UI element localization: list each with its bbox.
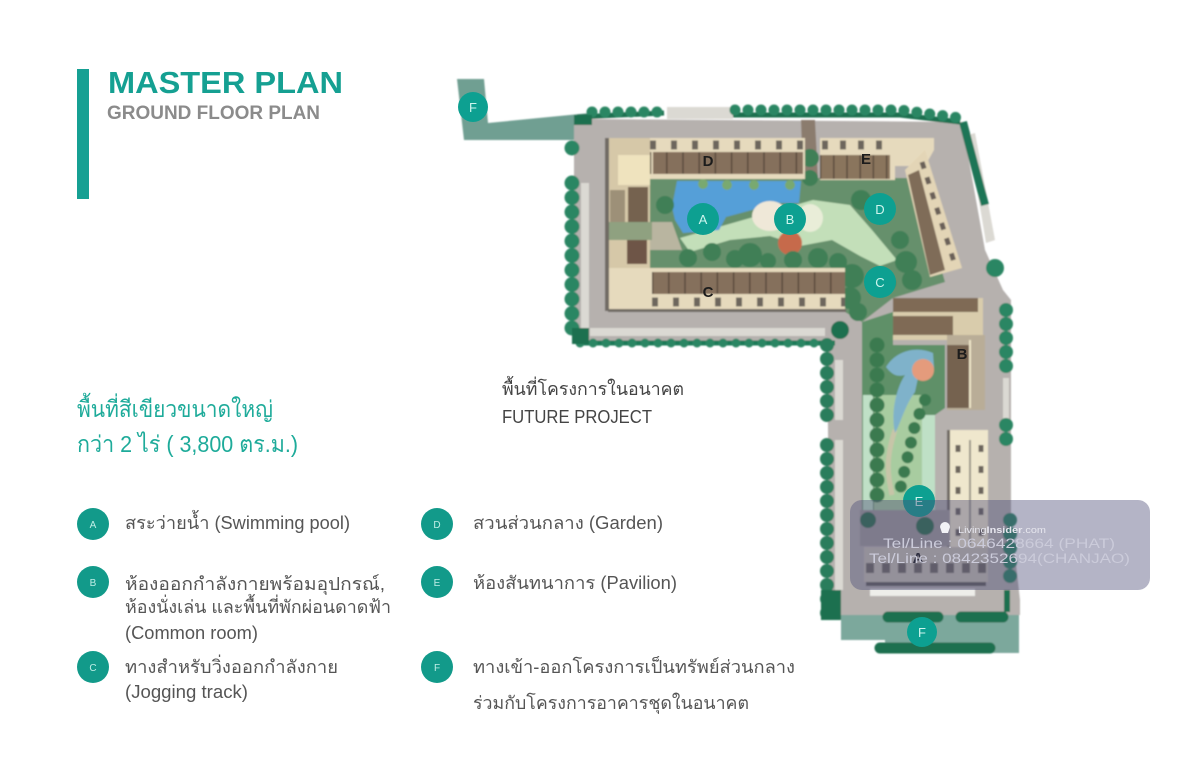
- legend item D: D: [433, 520, 441, 531]
- walking path: [888, 430, 895, 495]
- garden trees: [656, 149, 922, 321]
- map marker E: [903, 485, 935, 517]
- pool islands: [698, 179, 795, 190]
- green area heading: [77, 393, 298, 457]
- lawn: [680, 200, 897, 266]
- building labels: E: [861, 151, 871, 168]
- map marker F bottom: [907, 617, 937, 647]
- map marker D: [864, 193, 896, 225]
- upper garden: [650, 178, 945, 322]
- map marker C: [864, 266, 896, 298]
- green area heading: กว่า 2 ไร่ ( 3,800 ตร.ม.): [77, 431, 298, 457]
- building labels: [703, 151, 968, 567]
- lower right building: [950, 430, 988, 555]
- legend item B: [77, 566, 391, 643]
- left wing: [608, 138, 650, 274]
- legend item D: [421, 508, 663, 540]
- legend item B: ห้องนั่งเล่น และพื้นที่พักผ่อนดาดฟ้า: [125, 594, 391, 617]
- site plan: [457, 79, 1020, 653]
- legend item F: [421, 651, 795, 714]
- title: [107, 66, 343, 124]
- legend item E: E: [434, 578, 441, 589]
- watermark: [850, 500, 1150, 590]
- legend item E: [421, 566, 677, 598]
- future project label: FUTURE PROJECT: [502, 407, 652, 427]
- building A: [864, 547, 988, 582]
- green area heading: พื้นที่สีเขียวขนาดใหญ่: [77, 393, 273, 422]
- legend item B: B: [90, 578, 97, 589]
- building E upper block: [820, 138, 934, 180]
- building labels: C: [703, 284, 714, 301]
- map marker A: A: [699, 212, 708, 227]
- legend item B: (Common room): [125, 623, 258, 643]
- accent bar: [77, 69, 89, 199]
- garden tree column: [870, 345, 884, 510]
- lower garden: [862, 312, 945, 530]
- hedge bottom: [577, 340, 835, 346]
- legend item B: ห้องออกกำลังกายพร้อมอุปกรณ์,: [125, 574, 385, 595]
- hedge right: [1006, 310, 1010, 590]
- plaza: [860, 510, 950, 546]
- map marker B: B: [786, 212, 794, 227]
- map marker F top: F: [469, 100, 477, 115]
- legend item A: [77, 508, 350, 540]
- terrace: [778, 231, 802, 255]
- hedge lower left: [820, 345, 834, 615]
- building B: [893, 298, 983, 340]
- building labels: A: [913, 550, 924, 567]
- legend item C: ทางสำหรับวิ่งออกกำลังกาย: [125, 654, 338, 677]
- watermark: Tel/Line : 0646428664 (PHAT): [883, 536, 1115, 551]
- building C block: [608, 268, 845, 310]
- building labels: B: [957, 346, 968, 363]
- entry road top left: [457, 79, 590, 140]
- service path through block: [801, 120, 818, 180]
- legend item A: A: [90, 520, 97, 531]
- parking strips: [581, 107, 1009, 596]
- legend item C: [77, 651, 338, 702]
- legend: [77, 508, 795, 714]
- map marker A: [687, 203, 719, 235]
- legend item F: F: [434, 663, 440, 674]
- map marker D: D: [875, 202, 885, 217]
- stream pink pavilion: [912, 359, 934, 381]
- driveway: [574, 119, 1020, 615]
- building E diagonal: [905, 150, 962, 277]
- paths: [650, 222, 682, 250]
- legend item C: C: [89, 663, 97, 674]
- watermark: Tel/Line : 0842352694(CHANJAO): [869, 551, 1130, 566]
- sun deck right: [797, 204, 823, 232]
- map marker B: [774, 203, 806, 235]
- hedge left: [564, 148, 580, 335]
- future project label: พื้นที่โครงการในอนาคต: [502, 376, 684, 399]
- hedge top: [577, 113, 960, 122]
- future project label: [502, 376, 684, 427]
- stream: [886, 350, 934, 433]
- hedge diagonal right: [963, 122, 985, 205]
- sun deck: [752, 201, 788, 231]
- legend item F: ร่วมกับโครงการอาคารชุดในอนาคต: [473, 692, 749, 714]
- building labels: D: [703, 153, 714, 170]
- map marker E: E: [915, 494, 924, 509]
- title: MASTER PLAN: [108, 66, 343, 100]
- watermark: Living Insider .com: [958, 525, 1046, 536]
- legend item C: (Jogging track): [125, 682, 248, 702]
- map marker F bottom: F: [918, 625, 926, 640]
- legend item F: ทางเข้า-ออกโครงการเป็นทรัพย์ส่วนกลาง: [473, 655, 795, 677]
- legend item E: ห้องสันทนาการ (Pavilion): [473, 573, 677, 593]
- watermark logo: [940, 522, 950, 533]
- map marker F top: [458, 92, 488, 122]
- hedge around F: [880, 617, 1003, 648]
- building D block: [608, 138, 805, 179]
- pool: [672, 181, 801, 233]
- bottom entry road: [841, 615, 1019, 653]
- legend item A: สระว่ายน้ำ (Swimming pool): [125, 510, 350, 533]
- legend item D: สวนส่วนกลาง (Garden): [473, 513, 663, 533]
- title: GROUND FLOOR PLAN: [107, 103, 320, 124]
- map marker C: C: [875, 275, 885, 290]
